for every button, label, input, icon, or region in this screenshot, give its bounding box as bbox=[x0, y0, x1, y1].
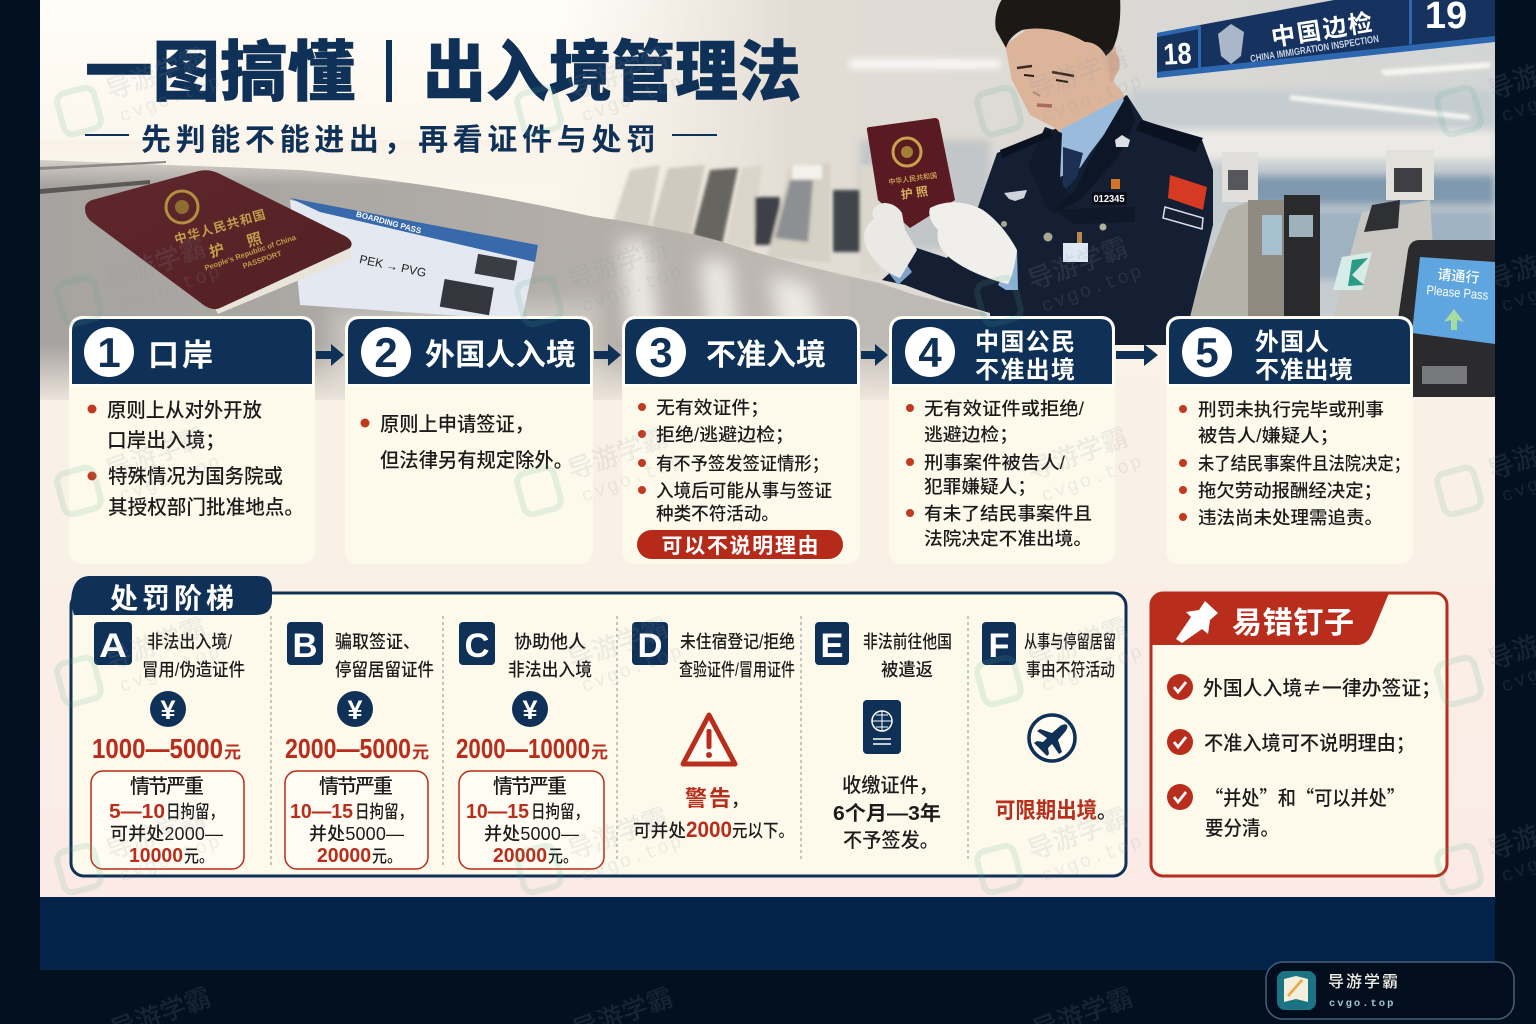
column B: 20000 bbox=[317, 845, 371, 867]
panel: common mistakes bbox=[1151, 593, 1447, 876]
arrow 3 to 4 bbox=[861, 344, 888, 366]
column E bbox=[815, 622, 952, 852]
watermarks: 导游学霸 bbox=[564, 422, 672, 486]
red pill: 可以不说明理由 bbox=[662, 535, 818, 558]
red passport: People's Republic of China bbox=[203, 232, 298, 273]
red passport: 中华人民共和国 bbox=[173, 207, 267, 247]
column F: F bbox=[988, 627, 1010, 665]
card 3: 不准入境: 拒绝/逃避边检； bbox=[656, 424, 794, 445]
red passport bbox=[85, 170, 352, 314]
title: 出入境管理法 bbox=[423, 35, 801, 109]
passport and boarding pass on counter bbox=[85, 170, 538, 340]
sign: China immigration inspection: 中国边检 bbox=[1269, 8, 1376, 52]
watermarks: cvgo.top bbox=[117, 260, 225, 318]
card 4: 中国公民不准出境: 中国公民 bbox=[975, 329, 1075, 356]
watermarks: 导游学霸 bbox=[102, 422, 210, 486]
column D: 元以下。 bbox=[732, 821, 794, 841]
column C: 元。 bbox=[548, 847, 578, 866]
card 4: 中国公民不准出境: 无有效证件或拒绝/ bbox=[924, 399, 1084, 419]
card 1: 口岸: 特殊情况为国务院或 bbox=[108, 465, 283, 488]
column E: 收缴证件， bbox=[842, 774, 938, 797]
background photo: border inspection hall bbox=[40, 0, 1495, 400]
sign: China immigration inspection: CHINA IMMIGRATION INSPECTION bbox=[1250, 34, 1380, 65]
icon: passport with globe bbox=[863, 700, 901, 754]
brand badge bbox=[1266, 962, 1514, 1019]
column F bbox=[982, 622, 1117, 823]
face details bbox=[1017, 66, 1074, 76]
watermarks: cvgo.top bbox=[579, 70, 687, 128]
please pass screen: 请通行 bbox=[1437, 266, 1480, 286]
column F: 事由不符活动 bbox=[1026, 660, 1115, 680]
item 1: 外国人入境≠一律办签证； bbox=[1203, 672, 1441, 701]
column D: 查验证件/冒用证件 bbox=[679, 660, 795, 680]
card 4: 中国公民不准出境: 4 bbox=[918, 329, 942, 376]
item 2: 不准入境可不说明理由； bbox=[1204, 732, 1415, 755]
brand badge: cvgo.top bbox=[1329, 998, 1395, 1010]
badges bbox=[1168, 175, 1207, 210]
arrow 4 to 5 bbox=[1116, 344, 1158, 366]
panel: penalty ladder bbox=[71, 576, 1126, 876]
column C: 并处5000— bbox=[484, 824, 579, 844]
column A: 情节严重 bbox=[130, 775, 204, 798]
card 4: 中国公民不准出境: 法院决定不准出境。 bbox=[924, 529, 1092, 549]
arrow 1 to 2 bbox=[316, 344, 344, 366]
column A: 日拘留， bbox=[166, 802, 224, 822]
heading: 易错钉子: 易错钉子 bbox=[1232, 607, 1354, 640]
gloves bbox=[864, 203, 917, 278]
column B bbox=[285, 622, 434, 869]
heading: 易错钉子 bbox=[1151, 593, 1389, 645]
card 3: 不准入境: 种类不符活动。 bbox=[656, 504, 779, 524]
column B: 2000—5000 bbox=[285, 733, 411, 764]
watermarks: 导游学霸 bbox=[102, 612, 210, 676]
column D: D bbox=[638, 627, 662, 665]
card 1: 口岸: 口岸出入境； bbox=[107, 429, 225, 452]
column D: 可并处 bbox=[633, 821, 686, 841]
counter bbox=[40, 160, 911, 400]
card 3: 不准入境 bbox=[622, 316, 860, 564]
neck and face bbox=[1005, 20, 1125, 150]
card 4: 中国公民不准出境: 不准出境 bbox=[975, 357, 1075, 384]
card 1: 口岸: 其授权部门批准地点。 bbox=[108, 496, 304, 519]
cuffs bbox=[888, 262, 912, 285]
hair bbox=[995, 0, 1120, 56]
column E: 非法前往他国 bbox=[863, 632, 952, 652]
arrows between step cards bbox=[316, 344, 1158, 366]
card 2: 外国人入境 bbox=[345, 316, 593, 564]
arrow 2 to 3 bbox=[594, 344, 621, 366]
column C bbox=[456, 622, 608, 869]
column F: 。 bbox=[1097, 801, 1117, 823]
watermarks: cvgo.top bbox=[117, 70, 225, 128]
title bbox=[85, 35, 801, 109]
column D: 警告 bbox=[685, 786, 731, 811]
watermarks: cvgo.top bbox=[1039, 830, 1147, 888]
column C: 情节严重 bbox=[493, 775, 567, 798]
column A: 元。 bbox=[184, 847, 214, 866]
card 1: 口岸: 口岸 bbox=[148, 338, 216, 373]
column B: 骗取签证、 bbox=[335, 632, 420, 652]
watermarks: cvgo.top bbox=[579, 450, 687, 508]
watermarks: cvgo.top bbox=[579, 260, 687, 318]
heading: 处罚阶梯: 处罚阶梯 bbox=[110, 583, 234, 614]
column C: C bbox=[464, 627, 490, 665]
icon: warning triangle bbox=[683, 715, 735, 764]
column A: 10000 bbox=[129, 845, 183, 867]
item 3: “并处”和“可以并处” bbox=[1205, 782, 1405, 811]
gates on right bbox=[1185, 150, 1495, 397]
watermarks: 导游学霸 bbox=[1024, 232, 1132, 296]
card 5: 外国人不准出境 bbox=[1166, 316, 1413, 564]
please pass screen: Please Pass bbox=[1426, 282, 1489, 303]
title: 一图搞懂 bbox=[85, 35, 355, 109]
column E: E bbox=[820, 627, 844, 665]
column A: 可并处2000— bbox=[110, 824, 223, 844]
column A: A bbox=[99, 627, 127, 665]
watermarks: 导游学霸 bbox=[1024, 612, 1132, 676]
column B: 元。 bbox=[372, 847, 402, 866]
card 4: 中国公民不准出境: 逃避边检； bbox=[924, 424, 1018, 445]
card 3: 不准入境: 入境后可能从事与签证 bbox=[656, 481, 832, 501]
icon: plane in circle bbox=[1029, 715, 1075, 761]
card 5: 外国人不准出境: 刑罚未执行完毕或刑事 bbox=[1198, 400, 1384, 420]
card 3: 不准入境: 不准入境 bbox=[706, 339, 826, 372]
watermarks: 导游学霸 bbox=[1024, 802, 1132, 866]
card 1: 口岸 bbox=[69, 316, 315, 564]
officer holding passport: 护 照 bbox=[900, 183, 929, 202]
card 5: 外国人不准出境: 被告人/嫌疑人； bbox=[1198, 426, 1339, 446]
column A: 1000—5000 bbox=[92, 733, 223, 764]
boarding pass: BOARDING PASS bbox=[355, 210, 423, 236]
watermarks: cvgo.top bbox=[1039, 260, 1147, 318]
column A: 5—10 bbox=[109, 801, 165, 823]
watermarks: 导游学霸 bbox=[564, 232, 672, 296]
boarding pass: PEK → PVG bbox=[358, 252, 428, 280]
officer holding passport: 中华人民共和国 bbox=[888, 171, 938, 186]
red passport: PASSPORT bbox=[241, 249, 283, 271]
automated gates behind counter bbox=[613, 163, 880, 262]
watermarks: cvgo.top bbox=[1039, 450, 1147, 508]
watermarks: 导游学霸 bbox=[102, 232, 210, 296]
watermarks: cvgo.top bbox=[1039, 70, 1147, 128]
column C: 20000 bbox=[493, 845, 547, 867]
column A: 非法出入境/ bbox=[147, 632, 232, 652]
card 4: 中国公民不准出境 bbox=[889, 316, 1115, 564]
item 2 bbox=[1167, 729, 1415, 755]
officer holding passport bbox=[850, 0, 1213, 345]
watermarks: cvgo.top bbox=[1039, 640, 1147, 698]
card 5: 外国人不准出境: 违法尚未处理需追责。 bbox=[1198, 508, 1383, 528]
card 2: 外国人入境: 但法律另有规定除外。 bbox=[380, 449, 573, 472]
column C: 2000—10000 bbox=[456, 733, 590, 764]
card 2: 外国人入境: 2 bbox=[374, 329, 398, 376]
card 3: 不准入境: 有不予签发签证情形； bbox=[656, 454, 829, 474]
column D: ， bbox=[731, 790, 749, 810]
watermarks: 导游学霸 bbox=[564, 42, 672, 106]
watermarks: 导游学霸 bbox=[102, 802, 210, 866]
column C: ¥ bbox=[522, 695, 538, 725]
item 3 bbox=[1167, 782, 1405, 840]
red pill bbox=[637, 530, 843, 559]
sign: China immigration inspection bbox=[1157, 0, 1495, 78]
card 4: 中国公民不准出境: 刑事案件被告人/ bbox=[924, 453, 1065, 473]
card 5: 外国人不准出境: 外国人 bbox=[1255, 329, 1329, 356]
boarding pass bbox=[290, 198, 538, 340]
watermarks: cvgo.top bbox=[117, 830, 225, 888]
column E: 被遣返 bbox=[881, 660, 933, 680]
counter front edge over officer bbox=[850, 278, 1010, 345]
card 1: 口岸: 1 bbox=[97, 329, 121, 376]
card 3: 不准入境: 3 bbox=[649, 329, 673, 376]
column B: ¥ bbox=[347, 695, 363, 725]
column C: 非法出入境 bbox=[508, 660, 592, 680]
column A: 元 bbox=[224, 743, 241, 762]
card 5: 外国人不准出境: 5 bbox=[1195, 329, 1219, 376]
sign: China immigration inspection: 18 bbox=[1163, 37, 1192, 72]
column C: 10—15 bbox=[466, 801, 529, 823]
column E: 不予签发。 bbox=[843, 829, 939, 852]
card 5: 外国人不准出境: 拖欠劳动报酬经决定； bbox=[1198, 481, 1382, 501]
subtitle: 先判能不能进出，再看证件与处罚 bbox=[141, 124, 656, 157]
officer holding passport: 012345 bbox=[1094, 194, 1125, 205]
watermarks: 导游学霸 bbox=[564, 802, 672, 866]
column B: 日拘留， bbox=[355, 802, 413, 822]
watermarks: cvgo.top bbox=[117, 450, 225, 508]
column C: 元 bbox=[591, 743, 608, 762]
card 5: 外国人不准出境: 不准出境 bbox=[1255, 357, 1353, 384]
column A: 冒用/伪造证件 bbox=[142, 660, 245, 680]
watermarks: cvgo.top bbox=[579, 640, 687, 698]
card 3: 不准入境: 无有效证件； bbox=[656, 398, 769, 418]
column D: 未住宿登记/拒绝 bbox=[680, 632, 795, 652]
item 3: 要分清。 bbox=[1205, 817, 1279, 840]
column C: 日拘留， bbox=[531, 802, 589, 822]
column B: B bbox=[292, 627, 318, 665]
column B: 并处5000— bbox=[309, 824, 404, 844]
column A bbox=[91, 622, 245, 869]
column B: 停留居留证件 bbox=[335, 660, 434, 680]
held passport bbox=[867, 118, 955, 228]
heading: 处罚阶梯 bbox=[71, 576, 272, 615]
column E: 6个月—3年 bbox=[833, 802, 941, 825]
card 2: 外国人入境: 外国人入境 bbox=[425, 339, 576, 372]
column A: ¥ bbox=[160, 695, 176, 725]
red passport: 护照 bbox=[207, 230, 264, 261]
watermarks: 导游学霸 bbox=[102, 42, 210, 106]
column B: 元 bbox=[412, 743, 429, 762]
please pass screen bbox=[1395, 240, 1495, 397]
column B: 10—15 bbox=[290, 801, 353, 823]
card 5: 外国人不准出境: 未了结民事案件且法院决定； bbox=[1198, 454, 1410, 474]
card 4: 中国公民不准出境: 有未了结民事案件且 bbox=[924, 504, 1092, 524]
column C: 协助他人 bbox=[514, 632, 586, 652]
watermarks: 导游学霸 bbox=[1024, 422, 1132, 486]
column B: 情节严重 bbox=[319, 775, 393, 798]
watermarks: 导游学霸 bbox=[1024, 42, 1132, 106]
column F: 可限期出境 bbox=[995, 798, 1097, 823]
watermarks: cvgo.top bbox=[117, 640, 225, 698]
card 4: 中国公民不准出境: 犯罪嫌疑人； bbox=[924, 477, 1036, 497]
column D: 2000 bbox=[686, 817, 732, 842]
card 1: 口岸: 原则上从对外开放 bbox=[107, 399, 262, 422]
column D bbox=[632, 622, 795, 842]
uniform bbox=[882, 95, 1213, 345]
brand badge: 导游学霸 bbox=[1328, 972, 1400, 991]
watermarks: 导游学霸 bbox=[564, 612, 672, 676]
watermarks: cvgo.top bbox=[579, 830, 687, 888]
card 2: 外国人入境: 原则上申请签证， bbox=[380, 413, 534, 436]
column F: 从事与停留居留 bbox=[1024, 632, 1116, 652]
